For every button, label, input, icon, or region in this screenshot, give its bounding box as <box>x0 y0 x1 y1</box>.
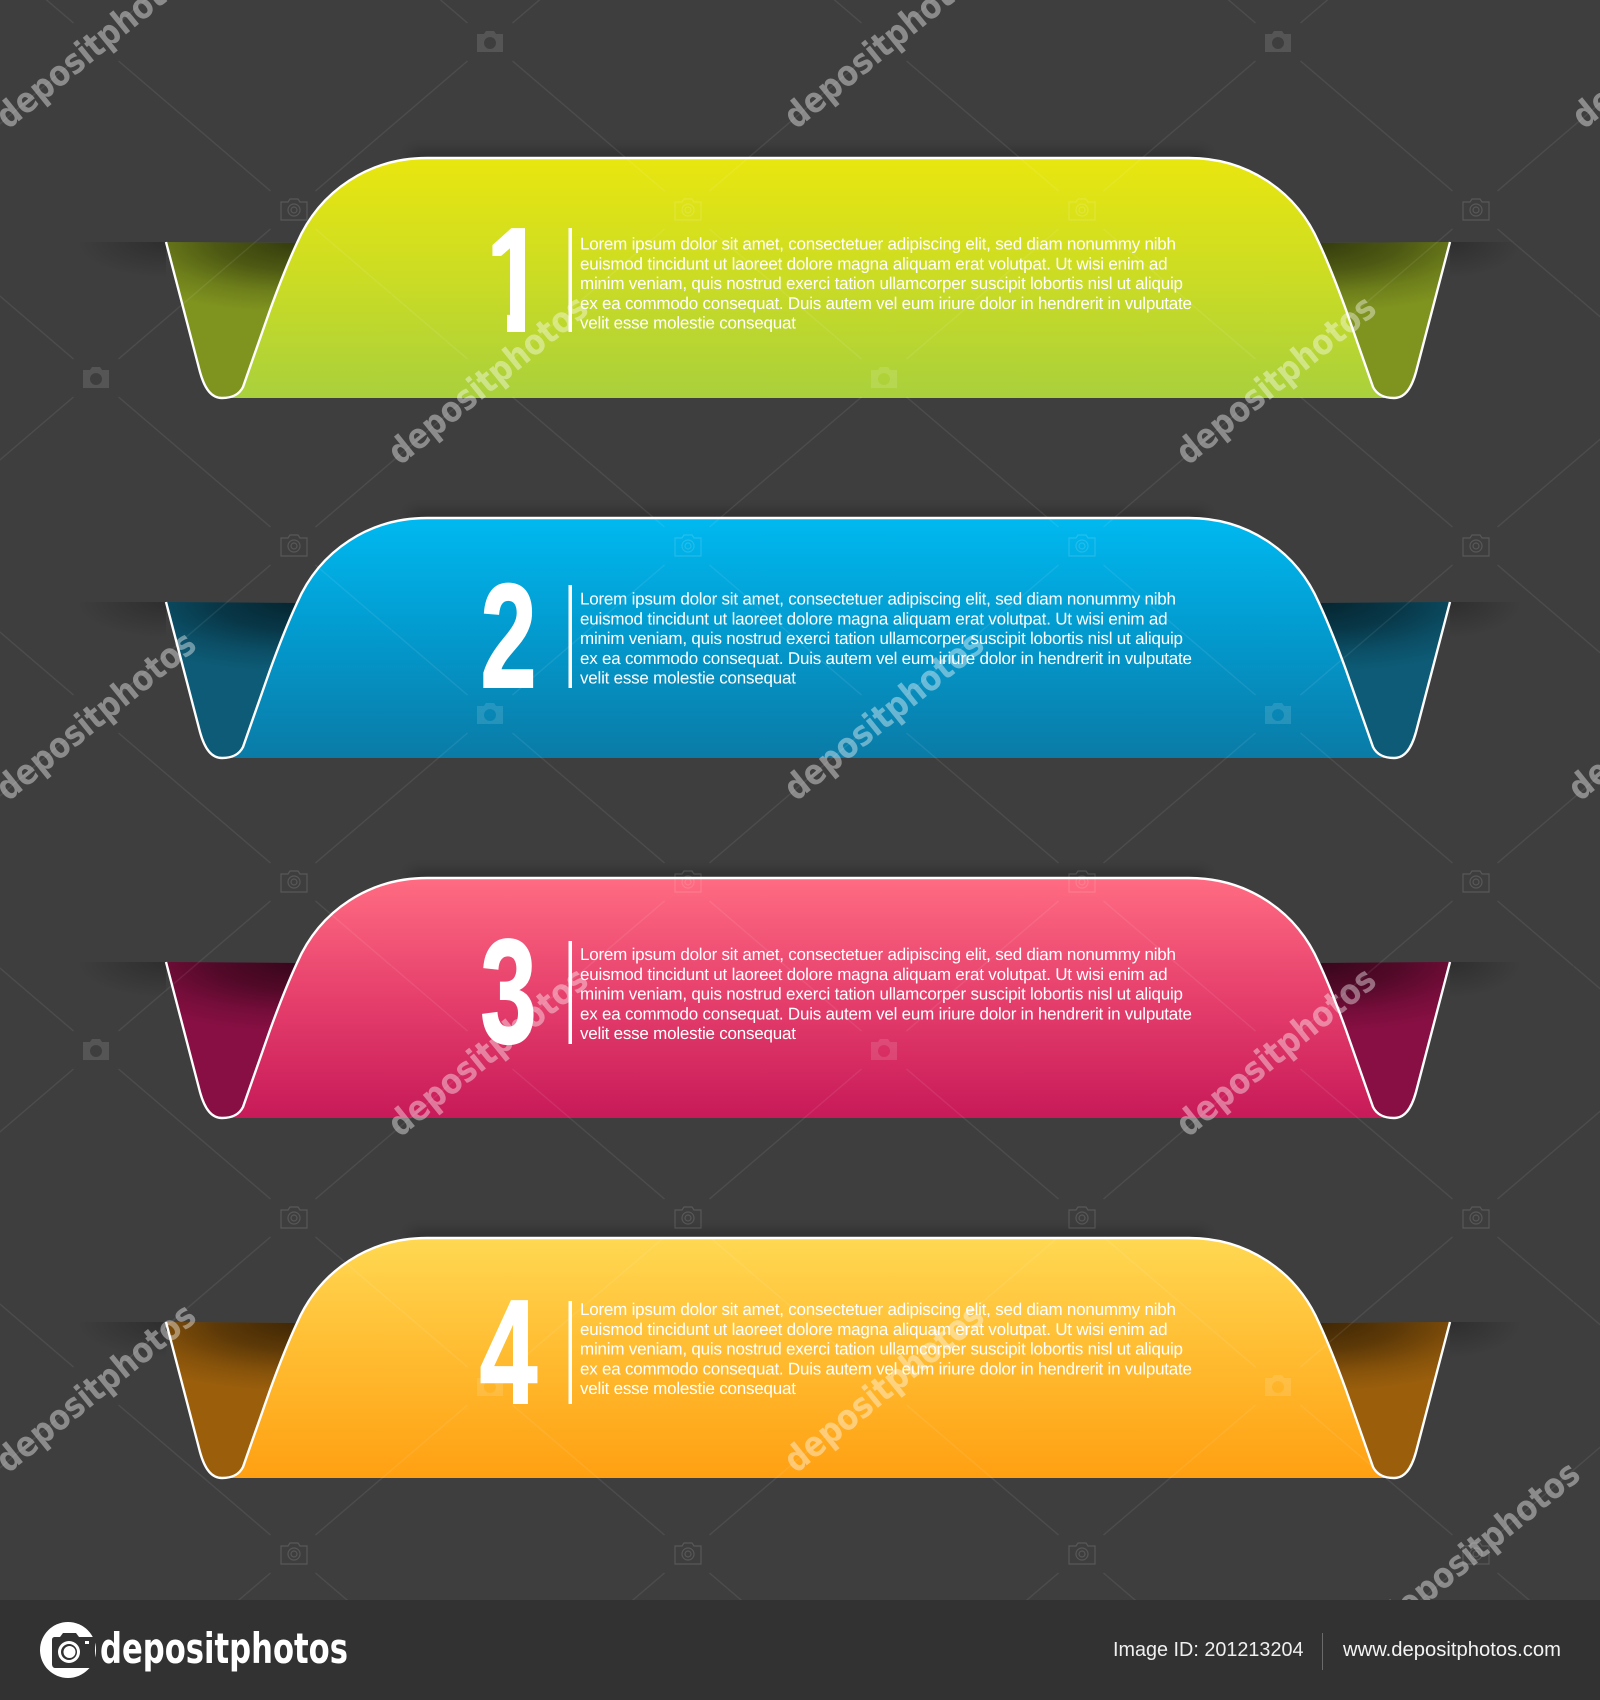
watermark texts: depositphotos <box>1168 288 1384 473</box>
icon: camera logo <box>40 1622 96 1678</box>
banner body <box>222 1238 1394 1478</box>
image id: Image ID: 201213204 <box>1113 1639 1304 1661</box>
body text: ex ea commodo consequat. Duis autem vel eum iriure dolor in hendrerit in vulputate <box>580 1004 1192 1023</box>
body text <box>580 234 1192 333</box>
divider <box>568 228 572 332</box>
right fold <box>1320 1322 1449 1477</box>
white outline <box>166 1238 1450 1478</box>
divider <box>568 1301 572 1404</box>
ribbon 2: blue <box>60 512 1556 762</box>
right fold <box>1320 602 1449 757</box>
banner body <box>222 158 1394 398</box>
body text: velit esse molestie consequat <box>580 314 796 333</box>
body text: Lorem ipsum dolor sit amet, consectetuer adipiscing elit, sed diam nonummy nibh <box>580 590 1176 608</box>
body text: velit esse molestie consequat <box>580 1024 796 1043</box>
white outline <box>166 878 1450 1118</box>
body text: minim veniam, quis nostrud exerci tation ullamcorper suscipit lobortis nisl ut aliquip <box>580 1340 1183 1359</box>
body text <box>580 1300 1192 1398</box>
body text: Lorem ipsum dolor sit amet, consectetuer adipiscing elit, sed diam nonummy nibh <box>580 1300 1176 1319</box>
ribbon 4: orange <box>60 1232 1556 1482</box>
body text <box>580 945 1192 1043</box>
body text: euismod tincidunt ut laoreet dolore magna aliquam erat volutpat. Ut wisi enim ad <box>580 609 1168 628</box>
website url: www.depositphotos.com <box>1342 1639 1561 1661</box>
body text: minim veniam, quis nostrud exerci tation ullamcorper suscipit lobortis nisl ut aliquip <box>580 629 1183 648</box>
watermark texts: depositphotos <box>776 624 992 809</box>
body text: ex ea commodo consequat. Duis autem vel eum iriure dolor in hendrerit in vulputate <box>580 294 1192 313</box>
watermark texts: depositphotos <box>1168 960 1384 1145</box>
divider <box>568 941 572 1044</box>
footer bar <box>0 1600 1600 1700</box>
white outline <box>166 518 1450 758</box>
body text: velit esse molestie consequat <box>580 669 796 688</box>
watermark texts: depositphotos <box>380 960 596 1145</box>
body text: velit esse molestie consequat <box>580 1379 796 1398</box>
banner body <box>222 878 1394 1118</box>
right fold <box>1320 962 1449 1117</box>
white outline <box>166 158 1450 398</box>
body text: minim veniam, quis nostrud exerci tation ullamcorper suscipit lobortis nisl ut aliquip <box>580 274 1183 293</box>
body text: Lorem ipsum dolor sit amet, consectetuer adipiscing elit, sed diam nonummy nibh <box>580 945 1176 964</box>
left fold <box>167 962 296 1117</box>
number 2: 2 <box>481 553 536 719</box>
number 1: 1 <box>486 198 545 363</box>
ribbon 3: pink <box>60 872 1556 1122</box>
number 4: 4 <box>480 1270 537 1435</box>
watermark texts: depositphotos <box>380 288 596 473</box>
left fold <box>167 1322 296 1477</box>
logo wordmark: depositphotos <box>100 1624 348 1673</box>
number 3: 3 <box>481 908 536 1074</box>
watermark texts: depositphotos <box>776 1296 992 1481</box>
right fold <box>1320 242 1449 397</box>
body text: ex ea commodo consequat. Duis autem vel eum iriure dolor in hendrerit in vulputate <box>580 649 1192 668</box>
body text <box>580 590 1192 688</box>
body text: ex ea commodo consequat. Duis autem vel eum iriure dolor in hendrerit in vulputate <box>580 1359 1192 1378</box>
body text: Lorem ipsum dolor sit amet, consectetuer adipiscing elit, sed diam nonummy nibh <box>580 234 1176 254</box>
body text: euismod tincidunt ut laoreet dolore magna aliquam erat volutpat. Ut wisi enim ad <box>580 1320 1168 1339</box>
divider <box>568 585 572 688</box>
ribbon 1: green <box>60 152 1556 402</box>
left fold <box>167 602 296 757</box>
body text: euismod tincidunt ut laoreet dolore magna aliquam erat volutpat. Ut wisi enim ad <box>580 254 1168 273</box>
left fold <box>167 242 296 397</box>
body text: minim veniam, quis nostrud exerci tation ullamcorper suscipit lobortis nisl ut aliquip <box>580 985 1183 1004</box>
banner body <box>222 518 1394 758</box>
body text: euismod tincidunt ut laoreet dolore magna aliquam erat volutpat. Ut wisi enim ad <box>580 965 1168 984</box>
